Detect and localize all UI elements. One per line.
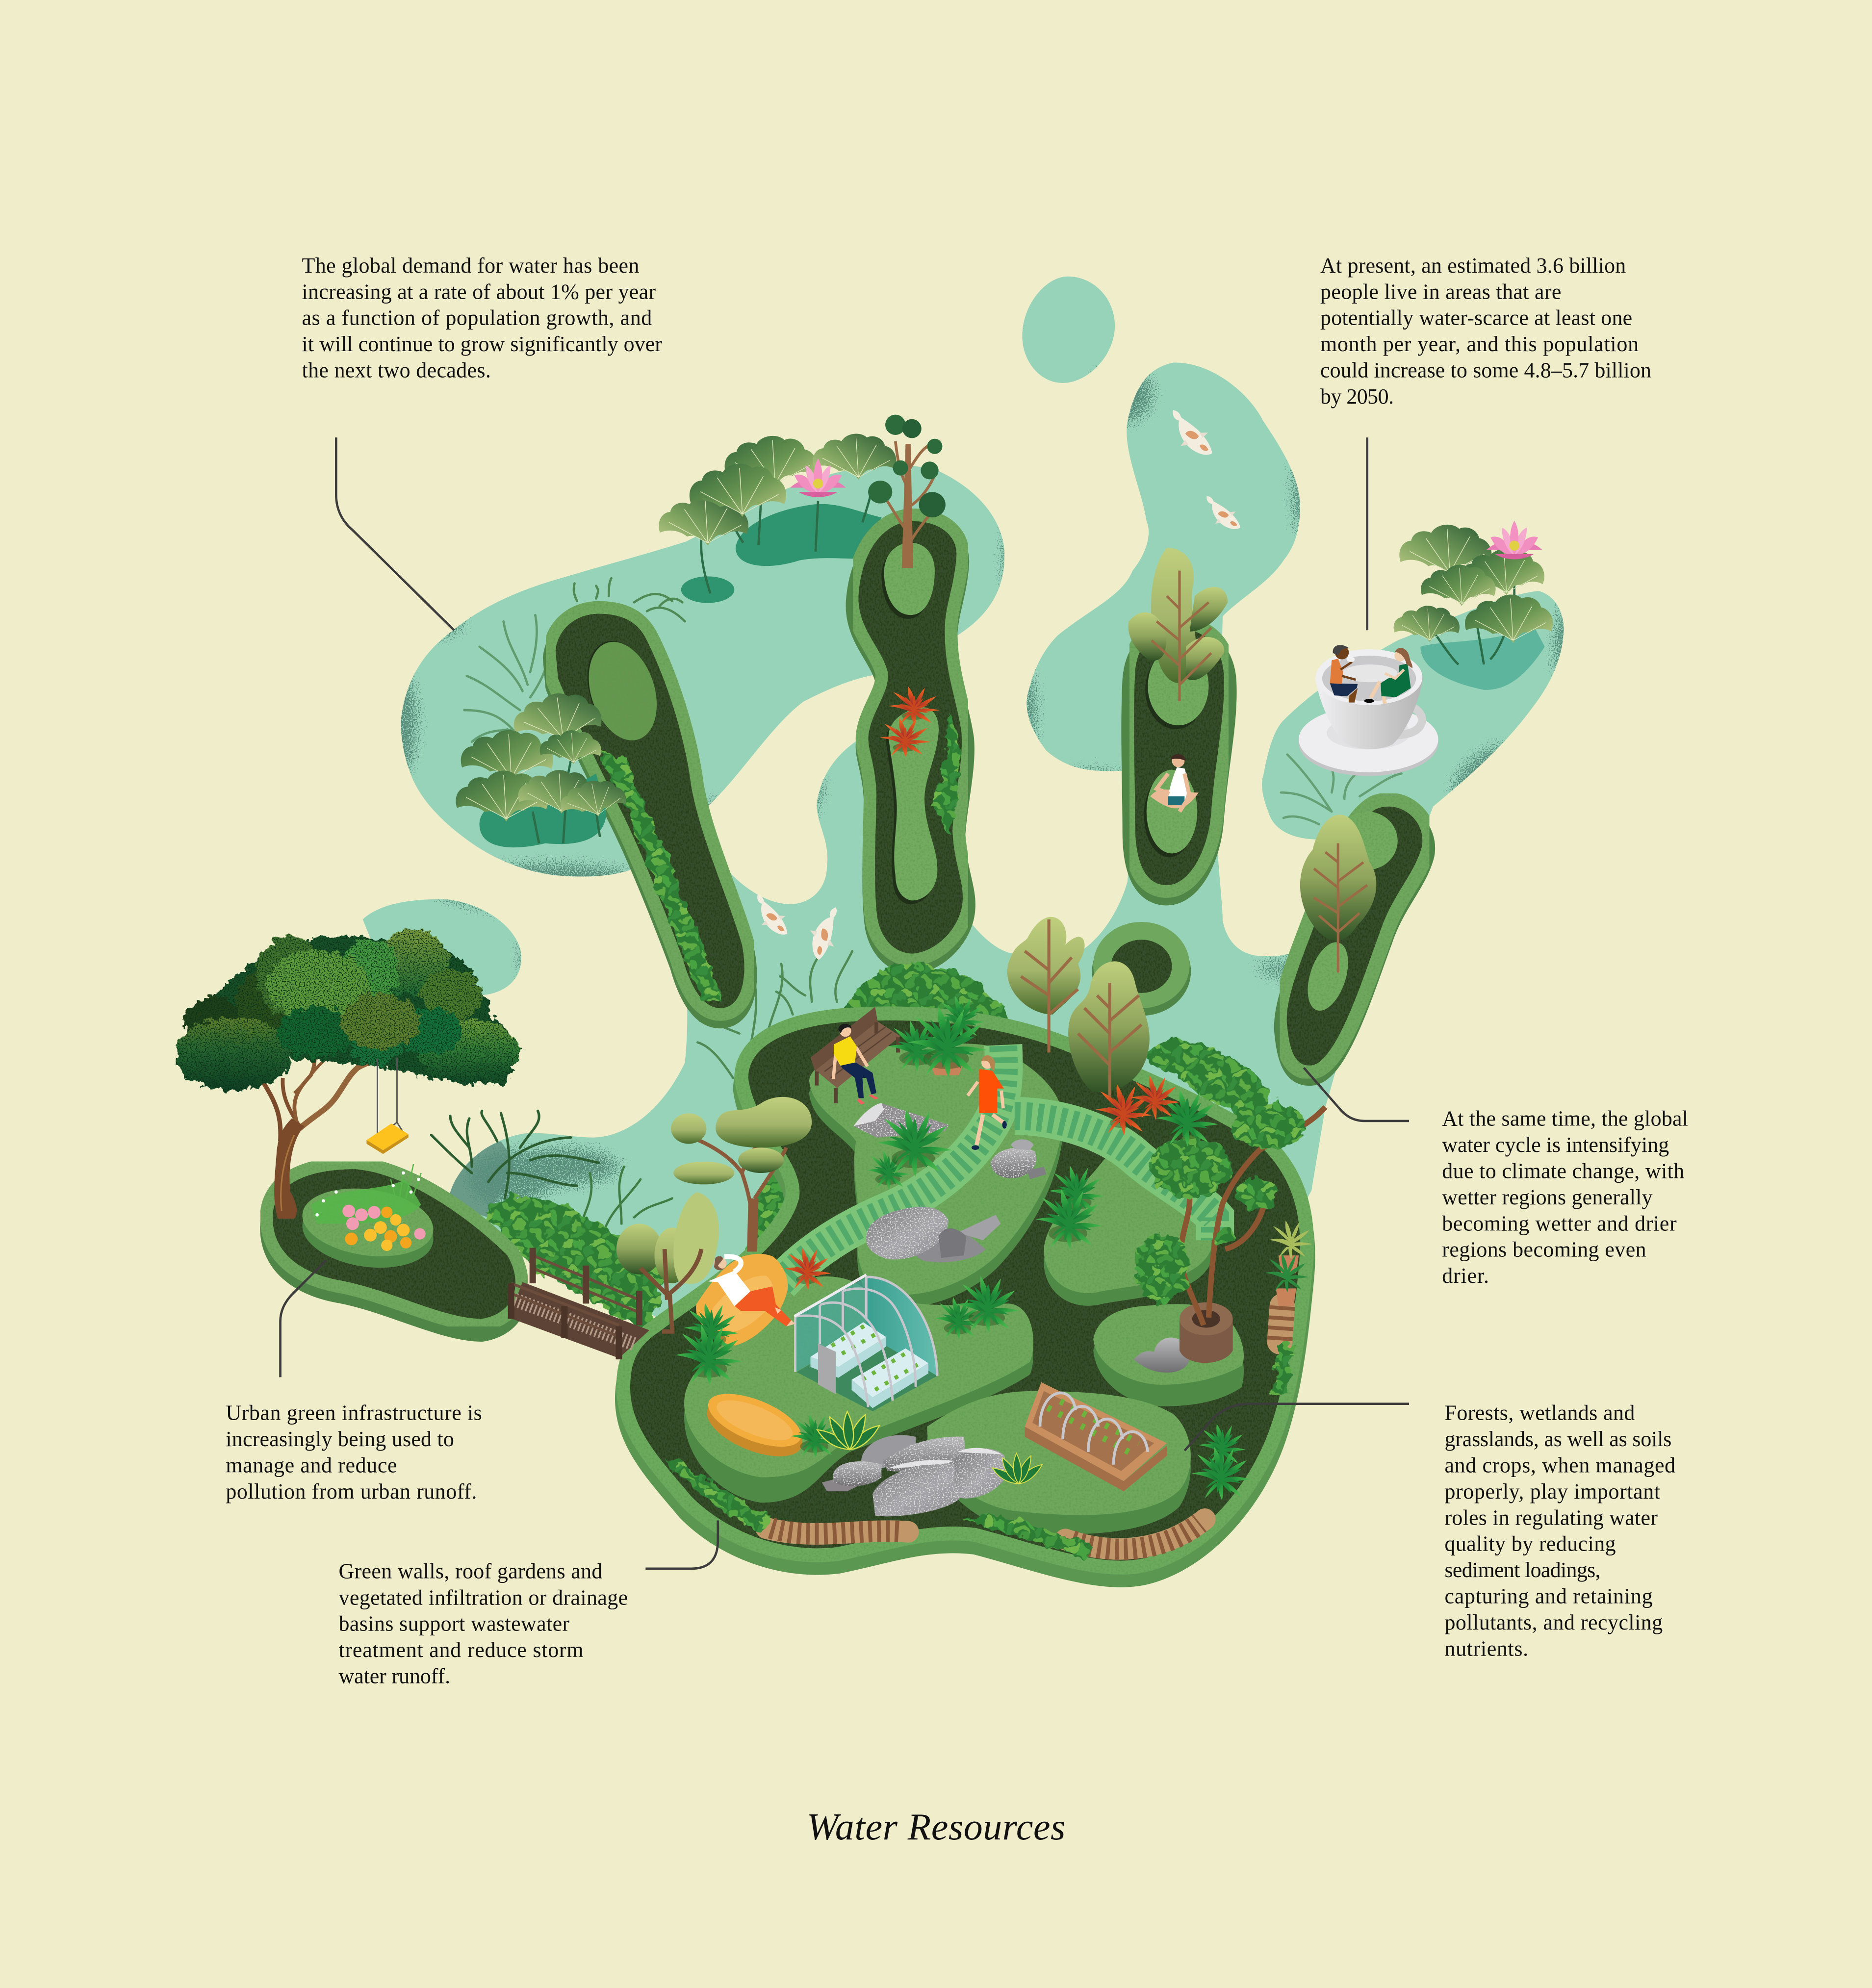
text: forests and wetlands: properly, play important [1444,1479,1660,1504]
water edge stipple [401,325,1564,1212]
lawn: right [1044,1155,1212,1306]
text: global demand [302,254,662,382]
head [981,1057,994,1069]
dress [979,1069,1004,1113]
reclining man in wicker chair [696,1254,795,1346]
man: head [840,1025,851,1037]
island rim [273,1169,515,1319]
text: water scarcity: by 2050. [1320,384,1394,408]
hydroponic bed far [810,1322,886,1367]
text: forests and wetlands: and crops, when managed [1444,1453,1675,1477]
man: raised arm [724,1256,741,1272]
seaweed: under cup [1281,755,1402,824]
man: trousers [735,1286,792,1326]
finger: rim [556,614,744,1008]
lawn: upper central [809,1044,1063,1307]
leader line: scarcity [1367,437,1368,630]
man: shirt [708,1271,750,1306]
text: green walls [339,1559,628,1688]
inner hedges [666,1342,1294,1557]
trunk [261,1046,416,1219]
text: forests and wetlands: quality by reducing [1444,1532,1616,1556]
text: urban green infrastructure: Urban green infrastructure is [226,1401,482,1425]
lawn: long lower [886,711,936,904]
leaves [659,496,748,546]
ring finger planter [1134,628,1224,893]
text: forests and wetlands: roles in regulating water [1444,1505,1658,1529]
lawn: planter [927,1391,1191,1534]
lawn: greenhouse [684,1276,1033,1503]
seaweed: palm centre [697,951,852,1078]
text: water scarcity: could increase to some 4.8–5.7 billion [1320,358,1651,382]
koi fish in palm pond and right pool [747,401,1246,963]
water: blob behind tree [363,899,521,995]
hedge: top [844,963,1015,1027]
woman in orange dress [968,1055,1007,1150]
person: man in orange [1330,645,1358,703]
arms [968,1082,1003,1108]
pond [736,504,881,566]
seedlings [1048,1401,1139,1452]
potted plants [1265,1221,1312,1306]
near rail [511,1283,619,1337]
rock: by stump [1134,1338,1190,1373]
deck planks [515,1300,634,1344]
text: global demand: increasing at a rate of about 1% per year [302,280,656,304]
tree on middle finger [868,415,946,568]
flower [790,459,846,497]
text: forests and wetlands: sediment loadings, [1444,1558,1601,1582]
text: water cycle: becoming wetter and drier [1442,1211,1677,1235]
cup rim [1316,649,1422,705]
ropes [372,1058,403,1147]
bench: legs [817,1022,898,1103]
steps: right [1280,1306,1282,1342]
leader line: green walls [645,1521,718,1569]
soil [1111,940,1172,993]
chair [696,1254,788,1346]
lawn: lower [1144,773,1195,857]
lawn: top [1145,651,1206,729]
pond [480,773,606,847]
stems [533,748,600,843]
text: forests and wetlands: pollutants, and recycling [1444,1610,1663,1634]
bonsai foliage [1135,1101,1308,1303]
text: water cycle: water cycle is intensifying [1442,1133,1669,1157]
steps: bottom right [1065,1519,1205,1549]
tree with lime cloud foliage [671,1097,812,1251]
deck [509,1282,649,1358]
hydroponic bed near [852,1349,928,1398]
bench: back [810,1007,878,1073]
hedges behind palm [482,963,1268,1331]
lawn: top [881,547,932,619]
pond [1420,628,1545,690]
snake plants [815,1411,1045,1488]
seaweed [431,578,1402,1236]
text: global demand: as a function of population growth, and [302,306,652,330]
bridge [509,1248,649,1359]
water: main hand-shaped pool [401,363,1564,1319]
tree: palm centre left [1007,917,1085,1052]
hedge: left inner [748,1163,801,1249]
bed soil [1032,1391,1154,1471]
text: global demand: The global demand for water has been [302,254,639,278]
red plants [784,1075,1180,1290]
text: water scarcity: people live in areas that are [1320,280,1561,304]
tree stump with bonsai [1135,1101,1325,1363]
text: water cycle: At the same time, the global [1442,1107,1688,1131]
island wall [273,1179,515,1329]
large tree with swing [175,930,519,1219]
small curled planter [1103,932,1180,1004]
bench: seat [816,1021,900,1088]
raised planter bed with hoops [1025,1382,1167,1491]
hedge: top right [1148,1039,1268,1116]
tree on pinky finger [1300,815,1376,972]
door [818,1344,836,1394]
text: water scarcity: At present, an estimated 3.6 billion [1320,254,1626,278]
greenhouse [795,1275,937,1411]
thumb island [273,1164,515,1329]
chair seat [713,1275,773,1331]
text: forests and wetlands: nutrients. [1444,1636,1528,1660]
plant: pale leaves [1269,1221,1312,1259]
bed frame [1025,1382,1167,1481]
seaweed: left lobe [464,615,548,755]
text: green walls: water runoff. [339,1664,450,1688]
tree on ring finger [1128,548,1228,701]
text: water cycle: wetter regions generally [1442,1185,1653,1209]
handle [1385,704,1422,735]
rock: centre group [866,1207,1000,1262]
rocks [822,1103,1190,1516]
finger: lawn [576,632,667,748]
rock: by path [991,1139,1046,1179]
middle finger planter [858,521,963,961]
text: green walls: treatment and reduce storm [339,1638,584,1662]
leaves [1399,525,1492,575]
hoops [1040,1393,1148,1465]
small pond [681,576,734,603]
hedge: left [482,1197,666,1331]
stump [1180,1319,1233,1363]
tree with rounded foliage [616,1192,719,1331]
leader line: water cycle [1304,1068,1409,1121]
seaweed: above index finger [574,578,685,621]
man: trousers [840,1063,876,1098]
man: arms [833,1047,868,1079]
saucer [1299,710,1438,776]
text: forests and wetlands: grasslands, as well as soils [1444,1427,1671,1451]
hedge: right edge [1271,1342,1294,1395]
leader line: urban green [281,1260,326,1377]
ridge [795,1275,866,1316]
lotus group: right [1394,521,1553,690]
table top [1342,664,1398,682]
bed side [1025,1427,1167,1491]
seat [366,1123,409,1150]
lawn: lower [1300,937,1356,1016]
stems [701,484,872,593]
seaweed: thumb side [431,1111,599,1198]
person: woman in green [1364,648,1412,704]
text: water cycle [1442,1107,1688,1288]
lawn: stump [1093,1304,1244,1406]
red plants [889,687,940,726]
hedge: lower left [666,1456,771,1530]
text: green walls: vegetated infiltration or drainage [339,1585,628,1609]
text: water scarcity: potentially water-scarce at least one [1320,306,1632,330]
man: shirt [834,1036,857,1066]
shoes [972,1146,979,1150]
text: forests and wetlands [1444,1401,1675,1660]
plant: pots [1276,1255,1299,1306]
text: water scarcity: month per year, and this population [1320,332,1639,356]
leaves [512,690,603,746]
glass back [866,1277,937,1376]
index finger planter [556,614,744,1016]
pinky finger planter [1287,807,1422,1073]
water: dark patch near thumb [448,1141,513,1218]
text: urban green infrastructure: manage and reduce [226,1453,397,1477]
rock: large front group [822,1435,1006,1516]
text: green walls: Green walls, roof gardens and [339,1559,602,1583]
seedlings [822,1324,922,1390]
text: urban green infrastructure: increasingly being used to [226,1427,454,1451]
hedge: lower right [964,1516,1093,1557]
text: green walls: basins support wastewater [339,1612,570,1636]
rock: near bench [853,1103,949,1138]
water shape [355,273,1611,1319]
stems [1427,558,1514,664]
person: meditating man [1151,754,1199,812]
text: water scarcity [1320,254,1651,408]
man: feet [775,1307,795,1326]
lotus group: left [456,690,628,847]
palm planter base [630,1020,1300,1572]
palm plants [675,996,1251,1500]
finger: side wall [556,621,744,1016]
text: urban green infrastructure: pollution from urban runoff. [226,1479,477,1504]
ring wall [1103,939,1180,1004]
island soil [273,1169,515,1319]
flower bed mound [298,1190,438,1275]
legs [976,1115,1004,1145]
leader line: demand [336,437,454,630]
bathtub planter [699,1383,810,1468]
path: long diagonal [780,1045,1004,1283]
water: top droplet [1022,277,1115,383]
hedge [932,713,960,837]
man: head [714,1257,726,1270]
text: urban green infrastructure [226,1401,482,1504]
flowers [311,1164,426,1251]
text: global demand: the next two decades. [302,358,491,382]
teacup with two people [1299,645,1438,776]
text: water cycle: drier. [1442,1264,1489,1288]
leader line: forests [1184,1404,1409,1451]
bench with seated man [810,1007,900,1104]
text: global demand: it will continue to grow significantly over [302,332,662,356]
text: forests and wetlands: Forests, wetlands and [1444,1401,1635,1425]
text: water cycle: due to climate change, with [1442,1159,1684,1183]
plant: dark leaves [1265,1253,1308,1293]
glass left wall [795,1277,866,1372]
path: right branch [1015,1116,1215,1240]
finger: hedge [596,748,723,1002]
canopy [175,930,519,1091]
finger: soil [556,614,744,1008]
man: shoes [857,1095,879,1104]
wooden steps [766,1306,1282,1550]
text: water cycle: regions becoming even [1442,1238,1646,1262]
steps: bottom left [766,1528,908,1534]
lawn: top [1337,812,1398,870]
striped garden paths [780,1045,1215,1283]
swing [366,1058,409,1154]
flower [1487,521,1542,559]
far rail [533,1255,639,1312]
arches [795,1277,937,1407]
title: Water Resources [807,1806,1065,1848]
lotus group: top [659,433,897,603]
cup body [1315,677,1423,749]
tree: palm centre right [1068,961,1150,1097]
floor [796,1331,937,1411]
text: forests and wetlands: capturing and retaining [1444,1584,1653,1608]
bonsai branches [1180,1107,1325,1325]
